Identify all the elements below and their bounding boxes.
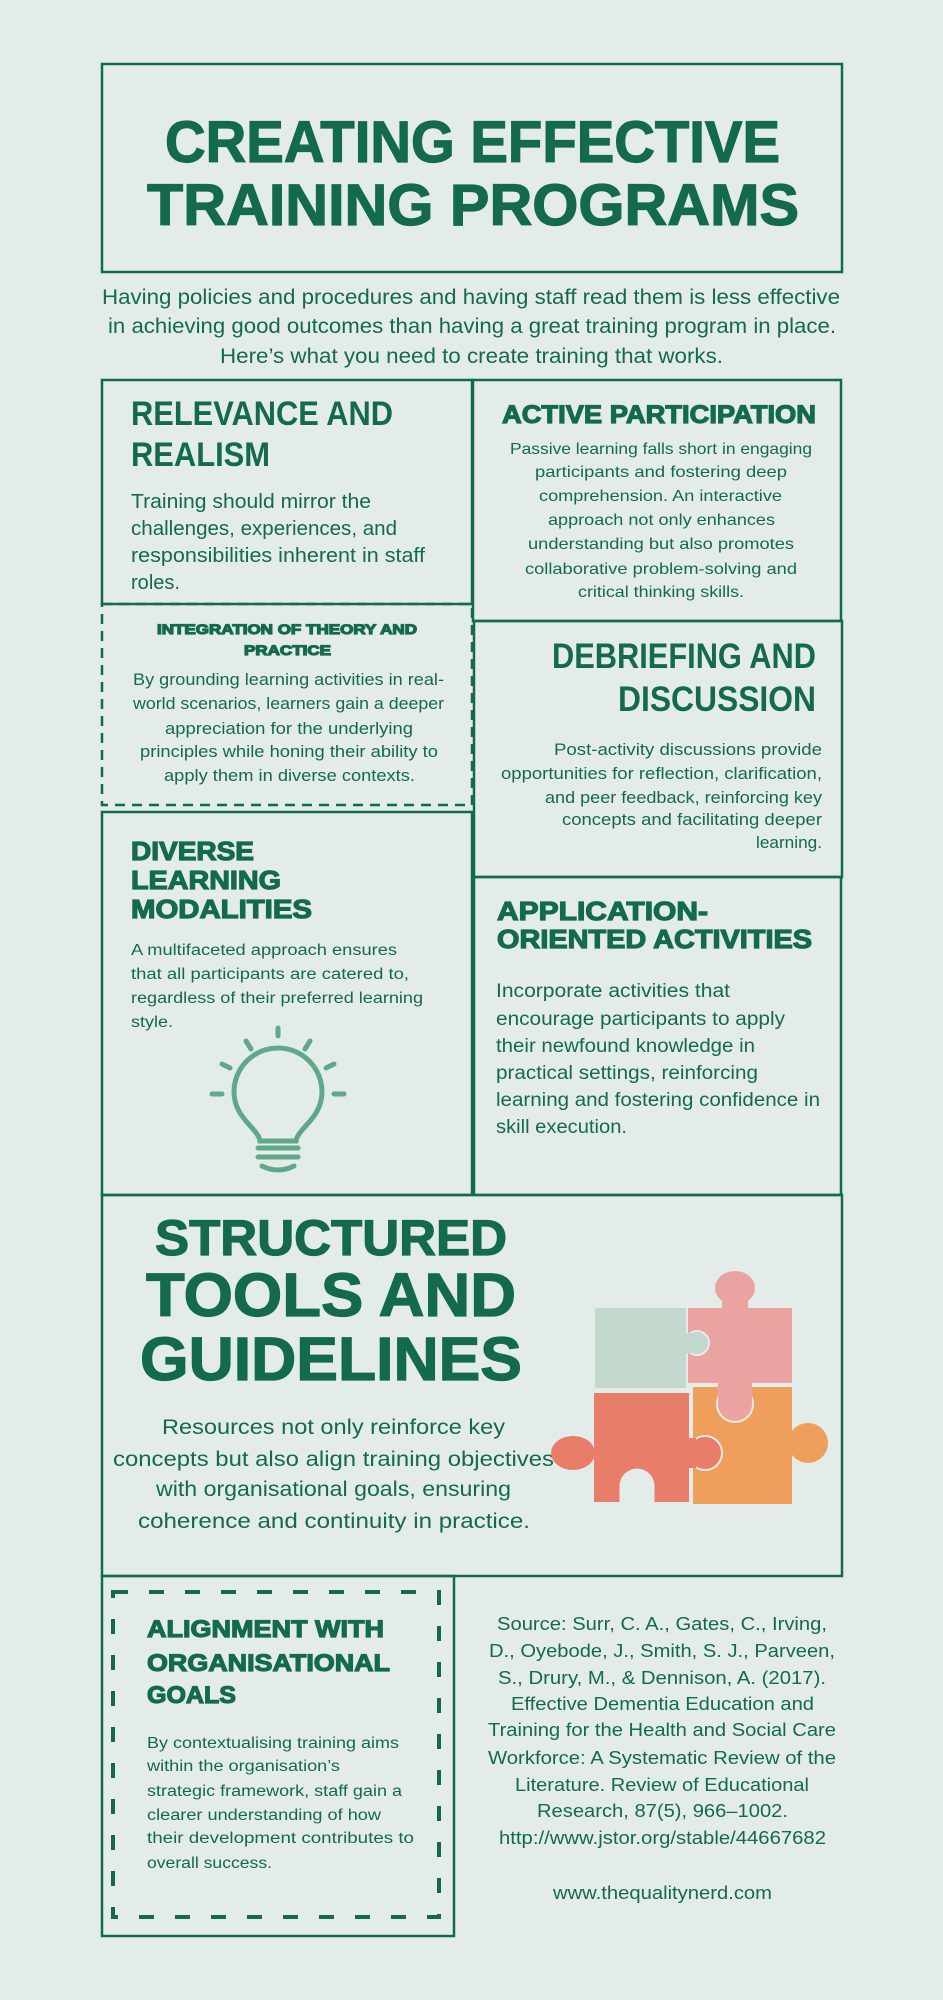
- panel: application-oriented activities: Incorporate activities that: [496, 981, 731, 1002]
- panel: application-oriented activities: [474, 877, 841, 1195]
- panel: relevance and realism: RELEVANCE AND: [131, 395, 393, 433]
- panel: alignment with organisational goals: their development contributes to: [147, 1830, 414, 1847]
- source citation: Literature. Review of Educational: [515, 1775, 809, 1795]
- panel: integration of theory and practice: PRACTICE: [244, 642, 331, 658]
- source citation: Training for the Health and Social Care: [488, 1720, 836, 1740]
- title box: TRAINING PROGRAMS: [147, 173, 799, 238]
- panel: application-oriented activities: practical settings, reinforcing: [496, 1063, 758, 1084]
- panel: structured tools and guidelines: concepts but also align training objectives: [113, 1448, 554, 1471]
- panel: diverse learning modalities: regardless of their preferred learning: [131, 990, 423, 1007]
- panel: diverse learning modalities: that all participants are catered to,: [131, 966, 409, 983]
- panel: structured tools and guidelines: GUIDELINES: [140, 1325, 522, 1393]
- panel: relevance and realism: roles.: [131, 572, 180, 594]
- source citation: http://www.jstor.org/stable/44667682: [499, 1828, 826, 1848]
- source citation: Source: Surr, C. A., Gates, C., Irving,: [497, 1614, 827, 1634]
- panel: structured tools and guidelines: STRUCTURED: [155, 1210, 507, 1266]
- panel: diverse learning modalities: [102, 812, 472, 1195]
- panel: alignment with organisational goals: ORGANISATIONAL: [147, 1650, 390, 1677]
- panel: debriefing and discussion: concepts and facilitating deeper: [562, 810, 822, 829]
- source citation: D., Oyebode, J., Smith, S. J., Parveen,: [489, 1641, 835, 1661]
- panel: alignment with organisational goals: ALIGNMENT WITH: [147, 1616, 384, 1643]
- panel: active participation: collaborative problem-solving and: [525, 561, 797, 578]
- source citation: Effective Dementia Education and: [511, 1694, 814, 1714]
- source citation: [488, 1614, 836, 1848]
- panel: diverse learning modalities: DIVERSE: [131, 836, 254, 866]
- panel: diverse learning modalities: LEARNING: [131, 865, 281, 895]
- panel: structured tools and guidelines: TOOLS AND: [146, 1261, 516, 1329]
- panel: structured tools and guidelines: with organisational goals, ensuring: [155, 1478, 511, 1501]
- intro text: Here’s what you need to create training that works.: [220, 345, 723, 368]
- panel: integration of theory and practice: INTEGRATION OF THEORY AND: [157, 621, 417, 637]
- panel: integration of theory and practice: [102, 604, 472, 805]
- intro text: Having policies and procedures and having staff read them is less effective: [102, 286, 840, 309]
- panel: active participation: critical thinking skills.: [578, 584, 744, 601]
- panel: application-oriented activities: APPLICATION-: [497, 896, 708, 926]
- panel: alignment with organisational goals: strategic framework, staff gain a: [147, 1783, 402, 1800]
- title box: [102, 64, 842, 272]
- panel: alignment with organisational goals: [102, 1576, 454, 1936]
- panel: alignment with organisational goals: By contextualising training aims: [147, 1735, 399, 1752]
- panel: active participation: understanding but also promotes: [528, 536, 794, 553]
- panel: integration of theory and practice: principles while honing their ability to: [140, 742, 438, 761]
- panel: active participation: Passive learning falls short in engaging: [510, 441, 812, 458]
- panel: debriefing and discussion: [474, 621, 842, 877]
- panel: application-oriented activities: encourage participants to apply: [496, 1009, 786, 1030]
- panel: integration of theory and practice: apply them in diverse contexts.: [164, 766, 415, 785]
- panel: integration of theory and practice: world scenarios, learners gain a deeper: [132, 694, 444, 713]
- panel: diverse learning modalities: style.: [131, 1014, 173, 1031]
- icon: light bulb: [212, 1028, 344, 1170]
- panel: active participation: approach not only enhances: [548, 512, 775, 529]
- panel: diverse learning modalities: MODALITIES: [131, 894, 312, 924]
- panel: debriefing and discussion: DEBRIEFING AND: [552, 637, 816, 676]
- source citation: Research, 87(5), 966–1002.: [537, 1801, 788, 1821]
- website: www.thequalitynerd.com: [552, 1883, 772, 1903]
- panel: alignment with organisational goals: overall success.: [147, 1855, 272, 1872]
- panel: debriefing and discussion: Post-activity discussions provide: [554, 740, 822, 759]
- panel: debriefing and discussion: and peer feedback, reinforcing key: [545, 788, 823, 807]
- panel: relevance and realism: REALISM: [131, 436, 270, 474]
- panel: structured tools and guidelines: Resources not only reinforce key: [162, 1416, 506, 1439]
- intro text: in achieving good outcomes than having a great training program in place.: [108, 315, 836, 338]
- icon: puzzle: [551, 1271, 828, 1506]
- panel: alignment with organisational goals: clearer understanding of how: [147, 1807, 382, 1824]
- panel: active participation: ACTIVE PARTICIPATION: [502, 401, 816, 429]
- panel: application-oriented activities: learning and fostering confidence in: [496, 1090, 820, 1111]
- panel: active participation: [473, 380, 841, 621]
- panel: debriefing and discussion: opportunities for reflection, clarification,: [501, 764, 822, 783]
- panel: structured tools and guidelines: coherence and continuity in practice.: [138, 1510, 530, 1533]
- panel: alignment with organisational goals: GOALS: [147, 1682, 236, 1709]
- panel: relevance and realism: Training should mirror the: [131, 491, 371, 513]
- panel: application-oriented activities: ORIENTED ACTIVITIES: [497, 924, 812, 954]
- panel: integration of theory and practice: By grounding learning activities in real-: [133, 670, 444, 689]
- title box: CREATING EFFECTIVE: [165, 110, 780, 175]
- panel: debriefing and discussion: DISCUSSION: [618, 680, 816, 719]
- intro text: [102, 286, 840, 368]
- panel: integration of theory and practice: appreciation for the underlying: [165, 719, 413, 738]
- panel: debriefing and discussion: learning.: [756, 833, 822, 852]
- panel: active participation: participants and fostering deep: [535, 464, 787, 481]
- panel: active participation: comprehension. An interactive: [539, 488, 782, 505]
- panel: application-oriented activities: skill execution.: [496, 1117, 627, 1138]
- source citation: S., Drury, M., & Dennison, A. (2017).: [498, 1668, 826, 1688]
- panel: structured tools and guidelines: [102, 1195, 842, 1576]
- panel: alignment with organisational goals: within the organisation’s: [146, 1758, 340, 1775]
- panel: relevance and realism: responsibilities inherent in staff: [131, 545, 425, 567]
- panel: relevance and realism: [102, 380, 472, 604]
- panel: application-oriented activities: their newfound knowledge in: [496, 1036, 755, 1057]
- source citation: Workforce: A Systematic Review of the: [488, 1748, 836, 1768]
- panel: diverse learning modalities: A multifaceted approach ensures: [131, 942, 397, 959]
- panel: relevance and realism: challenges, experiences, and: [131, 518, 397, 540]
